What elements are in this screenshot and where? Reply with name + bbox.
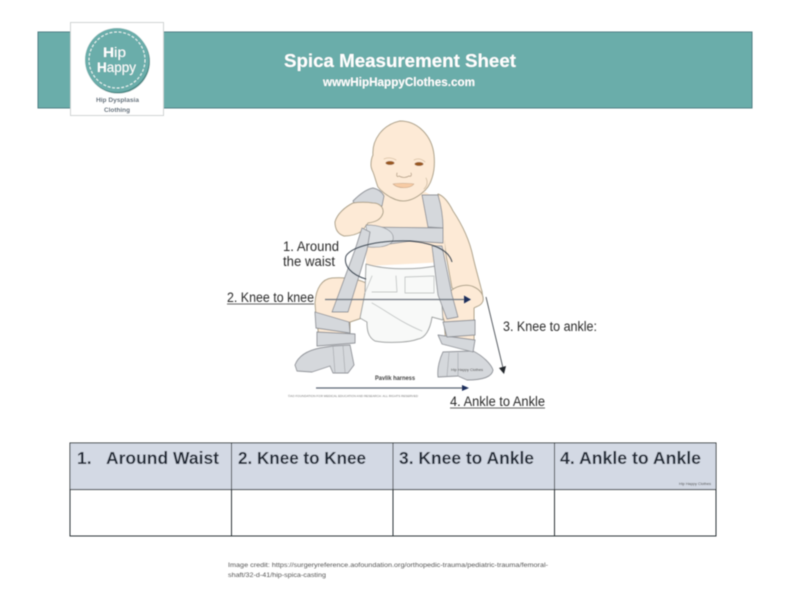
measurement table — [70, 443, 716, 536]
right cuffs and foot: Hip Happy Clothes — [451, 368, 483, 372]
column heading: knee to ankle: 3. Knee to Ankle — [399, 448, 534, 468]
baby illustration in Pavlik harness — [295, 121, 493, 380]
image credit: Image credit: https://surgeryreference.aofoundation.org/orthopedic-trauma/pediatric-trauma/femoral- — [228, 562, 548, 569]
right thigh and knee — [432, 285, 483, 345]
diaper — [360, 264, 443, 342]
chest strap — [369, 227, 443, 247]
left cuffs and foot — [295, 312, 355, 373]
waist measurement loop — [345, 241, 452, 279]
torso — [366, 192, 446, 266]
website url: wwwHipHappyClothes.com — [322, 75, 475, 89]
label: around the waist: 1. Around — [283, 239, 339, 254]
label: knee to knee: 2. Knee to knee — [227, 290, 314, 305]
logo: Hip Happy: Hip — [103, 44, 126, 60]
vertical leg straps — [432, 246, 458, 319]
label: around the waist: the waist — [283, 254, 335, 269]
baby face — [384, 158, 427, 189]
logo: Hip Happy: Happy — [97, 59, 136, 75]
column heading: around waist: 1. — [77, 448, 92, 468]
header band — [38, 32, 752, 108]
knee to ankle arrow — [486, 297, 506, 374]
right shoulder strap — [422, 195, 443, 228]
column heading: ankle to ankle: 4. Ankle to Ankle — [560, 448, 701, 468]
label: knee to ankle: 3. Knee to ankle: — [503, 319, 597, 334]
right arm — [438, 194, 482, 304]
left arm and fist — [335, 202, 383, 236]
illustration caption — [288, 375, 419, 398]
title: Spica Measurement Sheet — [284, 51, 516, 71]
illustration caption: ©AO FOUNDATION FOR MEDICAL EDUCATION AND RESEARCH. ALL RIGHTS RESERVED — [288, 394, 419, 398]
knee to knee arrow — [325, 296, 471, 304]
ankle to ankle arrow — [316, 385, 469, 391]
logo: Hip Happy — [70, 22, 164, 116]
left thigh and shin — [315, 278, 366, 343]
image credit: shaft/32-d-41/hip-spica-casting — [228, 572, 326, 579]
column heading: knee to knee: 2. Knee to Knee — [238, 448, 366, 468]
left shoulder strap — [353, 188, 384, 206]
image credit — [228, 562, 548, 579]
watermark: Hip Happy Clothes — [679, 482, 711, 486]
logo: Hip Happy: Clothing — [104, 107, 130, 114]
label: ankle to ankle: 4. Ankle to Ankle — [450, 394, 545, 409]
head — [371, 121, 434, 201]
right cuffs and foot — [438, 320, 493, 380]
column heading: around waist: Around Waist — [106, 448, 219, 468]
illustration caption: Pavlik harness — [375, 375, 415, 382]
logo: Hip Happy: Hip Dysplasia — [96, 97, 140, 104]
label: around the waist — [283, 239, 339, 269]
